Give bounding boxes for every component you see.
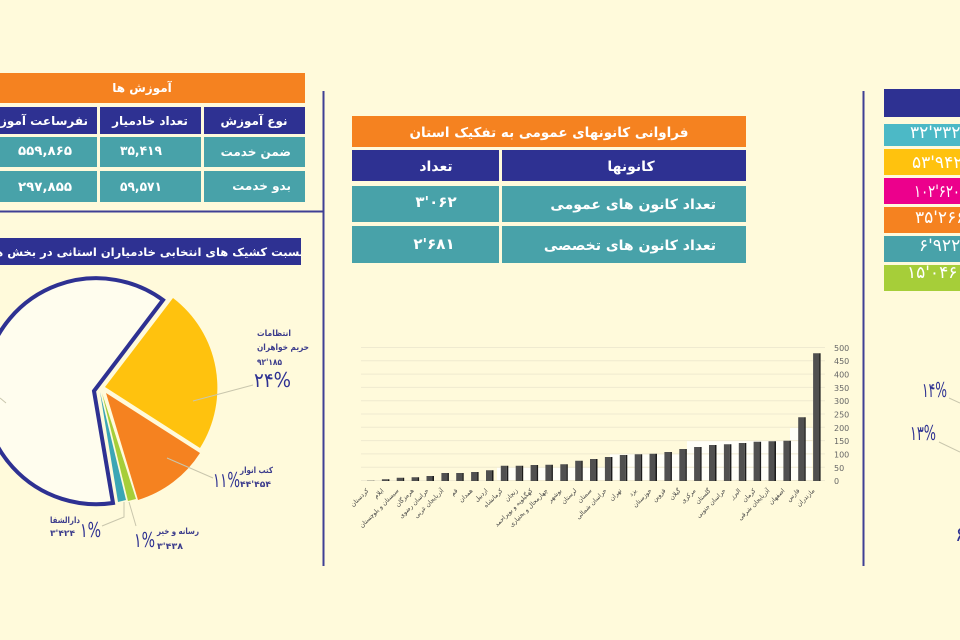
- province labels: چهارمحال و بختیاری: [508, 487, 550, 529]
- province labels: اصفهان: [768, 487, 787, 506]
- row: light blue: [884, 123, 960, 146]
- table header row: نوع آموزش: [221, 113, 287, 129]
- province labels: سمنان: [576, 487, 593, 504]
- panel dividers: [0, 91, 864, 566]
- province labels: کهگیلویه و بویراحمد: [493, 487, 534, 528]
- table row: pre-service: [0, 171, 305, 202]
- label: media and charity: رسانه و خیر: [156, 527, 199, 537]
- label: orange slice: [213, 466, 273, 492]
- label: media and charity: [134, 527, 199, 552]
- label: dar al-shifa: [50, 516, 101, 542]
- province labels: البرز: [728, 487, 743, 502]
- label: yellow slice: ۲۴%: [254, 368, 291, 392]
- province labels: اردبیل: [473, 487, 490, 504]
- row: orange: [884, 207, 960, 233]
- table title: centers: فراوانی کانونهای عمومی به تفکیک استان: [410, 125, 688, 141]
- table header row: تعداد خادمیار: [111, 114, 188, 128]
- value axis: 0: [834, 477, 839, 486]
- leader lines right: [939, 398, 960, 452]
- table row: public: ۳'۰۶۲: [415, 193, 457, 211]
- label: orange slice: ۴۴'۴۵۴: [240, 480, 271, 490]
- table row: pre-service: ۲۹۷,۸۵۵: [18, 180, 72, 195]
- value axis: 150: [834, 437, 849, 446]
- province labels: قزوین: [651, 487, 667, 504]
- province labels: آذربایجان غربی: [412, 486, 446, 520]
- province labels: مازندران: [796, 487, 816, 508]
- leader lines: [0, 385, 253, 526]
- province labels: بوشهر: [546, 487, 564, 505]
- province labels: تهران: [608, 487, 624, 503]
- label: dar al-shifa: ۳'۴۲۴: [50, 529, 75, 539]
- table header row: کانونها: [607, 159, 655, 175]
- province labels: کردستان: [349, 487, 370, 508]
- slice: green: [102, 393, 136, 501]
- province labels: فارس: [786, 487, 801, 503]
- label: orange slice: ۱۱%: [213, 468, 240, 492]
- table header row: [352, 150, 746, 181]
- table: trainings: [0, 73, 305, 202]
- value axis: 50: [834, 464, 844, 473]
- table row: public: [352, 186, 746, 222]
- table title: trainings: [0, 73, 305, 103]
- table row: in-service: [0, 137, 305, 167]
- row: yellow: [884, 149, 960, 175]
- label: yellow slice: ۹۲'۱۸۵: [257, 358, 282, 368]
- row: teal: [884, 236, 960, 262]
- value axis: 500: [834, 344, 849, 353]
- heading: shift share: نسبت کشیک های انتخابی خادمیاران استانی در بخش ها: [0, 245, 304, 259]
- value axis: 400: [834, 370, 849, 380]
- province labels: هرمزگان: [394, 487, 415, 509]
- province labels: خوزستان: [632, 487, 654, 509]
- table row: public: تعداد کانون های عمومی: [550, 197, 716, 213]
- province labels: سیستان و بلوچستان: [358, 487, 400, 529]
- label: yellow slice: انتظامات: [257, 329, 291, 339]
- label: dar al-shifa: ۱%: [80, 518, 101, 542]
- row: green: ۱۵'۰۴۶: [907, 263, 957, 283]
- province labels: یزد: [628, 487, 639, 498]
- label: yellow slice: حریم خواهران: [257, 343, 309, 353]
- province labels: زنجان: [504, 487, 519, 503]
- label: orange slice: کتب انوار: [239, 466, 273, 476]
- heading: shift share: [0, 238, 304, 265]
- table title: centers: [352, 116, 746, 147]
- province labels: ایلام: [373, 487, 386, 500]
- province labels: خراسان شمالی: [575, 487, 609, 521]
- value axis: 300: [834, 397, 849, 406]
- bars: [367, 353, 821, 481]
- row: green: [884, 263, 960, 291]
- row: light blue: ۳۲'۳۳۲: [910, 123, 960, 143]
- row: magenta: [884, 178, 960, 204]
- chart backdrop steps: [497, 428, 812, 481]
- province labels: قم: [449, 487, 459, 497]
- province labels: لرستان: [560, 487, 578, 506]
- table title: trainings: آموزش ها: [112, 80, 173, 96]
- table header row: [0, 107, 305, 134]
- chart grid lines: [361, 348, 825, 480]
- province labels: همدان: [458, 487, 474, 504]
- table row: specialized: ۲'۶۸۱: [413, 235, 455, 253]
- label: dar al-shifa: دارالشفا: [50, 516, 81, 526]
- value axis: 450: [834, 357, 849, 366]
- bar chart: centers by province: [349, 344, 849, 529]
- table row: specialized: [352, 226, 746, 263]
- table row: pre-service: ۵۹,۵۷۱: [120, 180, 162, 195]
- label: 13 percent: ۱۳%: [910, 421, 936, 445]
- table row: specialized: تعداد کانون های تخصصی: [544, 238, 716, 254]
- header cell: [884, 89, 960, 117]
- slice: yellow: [105, 298, 217, 448]
- value axis: 100: [834, 450, 849, 460]
- province labels: کرمانشاه: [483, 487, 504, 509]
- pie chart: [0, 278, 309, 552]
- table: right column: [884, 89, 960, 291]
- slice: teal: [100, 392, 126, 502]
- row: teal: ۶'۹۲۲: [919, 236, 960, 256]
- value axis: 350: [834, 384, 849, 393]
- right pie labels: [910, 378, 960, 546]
- label: yellow slice: [254, 329, 309, 392]
- province labels: مرکزی: [680, 487, 697, 505]
- table row: in-service: ۵۵۹,۸۶۵: [18, 144, 72, 159]
- province labels: [349, 486, 816, 529]
- province labels: خراسان رضوی: [398, 487, 431, 520]
- table header row: تعداد: [419, 159, 453, 175]
- value axis: [834, 344, 849, 486]
- province labels: گیلان: [668, 487, 682, 502]
- table row: pre-service: بدو خدمت: [232, 179, 291, 194]
- label: media and charity: ۱%: [134, 528, 155, 552]
- slice: largest outlined: [0, 278, 163, 504]
- province labels: گلستان: [693, 487, 712, 506]
- slice: orange: [106, 393, 200, 500]
- province labels: کرمان: [741, 487, 757, 504]
- value axis: 200: [834, 424, 849, 433]
- table row: in-service: ۳۵,۴۱۹: [120, 144, 162, 159]
- table row: in-service: ضمن خدمت: [221, 145, 291, 159]
- value axis: 250: [834, 410, 849, 420]
- province labels: آذربایجان شرقی: [735, 486, 772, 522]
- label: media and charity: ۳'۴۳۸: [157, 542, 184, 552]
- table: public centers: [352, 116, 746, 263]
- province labels: خراسان جنوبی: [695, 487, 728, 520]
